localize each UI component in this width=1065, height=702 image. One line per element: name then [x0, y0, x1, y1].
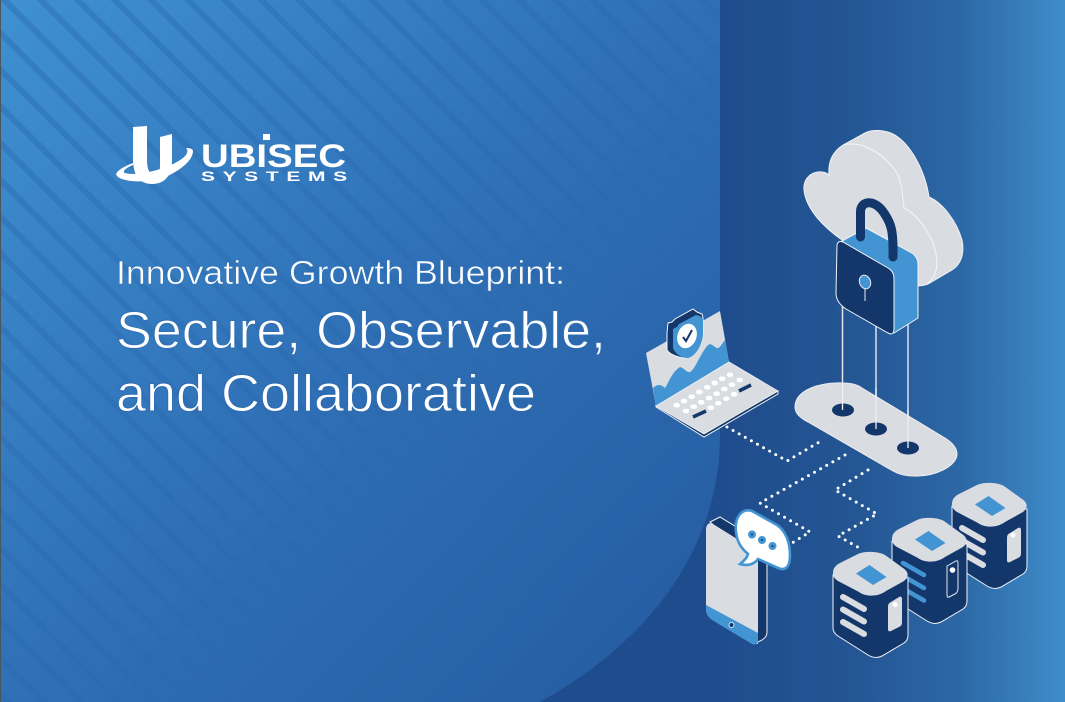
- icon: server 3 (back): [952, 483, 1027, 588]
- shield badge: [667, 309, 703, 358]
- home button: [729, 622, 734, 628]
- keyboard bars: [693, 385, 751, 417]
- icon: cloud: [804, 130, 963, 286]
- icon: server 2 (middle): [892, 518, 967, 623]
- title: [116, 255, 606, 423]
- keys: [676, 375, 741, 411]
- keyboard deck: [656, 362, 778, 434]
- icon: server 1 (front): [833, 552, 908, 657]
- dotted network connectors: [727, 427, 877, 550]
- phone home bar: [706, 605, 758, 644]
- logo: Ubisec Systems: [116, 126, 355, 184]
- laptop base edge: [656, 391, 778, 437]
- logo wordmark: UBISEC: [201, 138, 346, 174]
- left background panel with diagonal stripes: [0, 0, 720, 702]
- lines from lock to base: [842, 305, 908, 448]
- speech bubble: [736, 510, 790, 569]
- bubble dots: [748, 530, 776, 550]
- phone front: [706, 523, 758, 644]
- icon: phone with speech bubble: [706, 510, 790, 644]
- logo I dot: [263, 134, 270, 140]
- title: Secure, Observable,: [116, 302, 606, 360]
- icon: connection base with three ports: [795, 383, 957, 476]
- logo mark: U with swoosh: [116, 126, 193, 184]
- laptop screen: [646, 311, 729, 406]
- title: Innovative Growth Blueprint:: [116, 255, 565, 292]
- screen chart: [653, 340, 729, 406]
- phone side: [710, 517, 767, 644]
- icon: padlock: [836, 203, 918, 334]
- icon: laptop: [646, 309, 778, 437]
- logo subtitle: SYSTEMS: [201, 168, 355, 184]
- title: and Collaborative: [116, 365, 536, 423]
